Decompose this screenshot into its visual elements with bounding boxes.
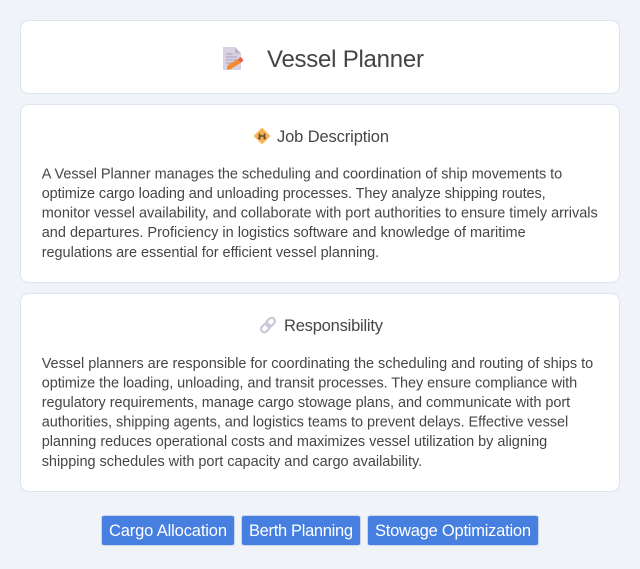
- panel: title: [20, 20, 620, 94]
- text block: job description: [42, 166, 598, 261]
- tag: Stowage Optimization: Stowage Optimization: [375, 522, 531, 540]
- icon: document with pencil: [223, 47, 244, 70]
- text block: job description: monitor vessel availability, and collaborate with port authorities to ensure timely arrivals: [42, 206, 598, 222]
- tag: Berth Planning: [242, 516, 360, 546]
- heading: job description: Job Description: [277, 128, 389, 146]
- icon: diamond sign: [254, 128, 270, 144]
- panel: responsibility: [20, 294, 620, 492]
- tag: Cargo Allocation: Cargo Allocation: [109, 522, 227, 540]
- text block: job description: and departures. Proficiency in logistics software and knowledge of maritime: [42, 225, 526, 241]
- tag: Cargo Allocation: [102, 516, 234, 546]
- icon: chain link: [260, 316, 276, 334]
- text block: job description: regulations are essential for efficient vessel planning.: [42, 245, 379, 261]
- text block: job description: optimize cargo loading and unloading processes. They analyze shipping routes,: [42, 186, 546, 202]
- tag: Berth Planning: Berth Planning: [249, 522, 353, 540]
- panel: job description: [20, 104, 620, 282]
- text block: responsibility: regulatory requirements, manage cargo stowage plans, and communicate with port: [42, 395, 570, 411]
- text block: responsibility: Vessel planners are responsible for coordinating the scheduling and routing of ships to: [42, 356, 593, 372]
- text block: responsibility: [42, 356, 593, 470]
- text block: responsibility: optimize the loading, unloading, and transit processes. They ensure compliance with: [42, 375, 577, 391]
- text block: responsibility: shipping schedules with port capacity and cargo availability.: [42, 454, 422, 470]
- tag: Stowage Optimization: [368, 516, 538, 546]
- heading: Vessel Planner: Vessel Planner: [267, 46, 424, 73]
- heading: responsibility: Responsibility: [284, 317, 384, 335]
- text block: responsibility: planning reduces operational costs and maximizes vessel utilization by aligning: [42, 434, 547, 450]
- text block: job description: A Vessel Planner manages the scheduling and coordination of ship movements to: [42, 166, 562, 182]
- text block: responsibility: authorities, shipping agents, and logistics teams to prevent delays. Effective vessel: [42, 415, 568, 431]
